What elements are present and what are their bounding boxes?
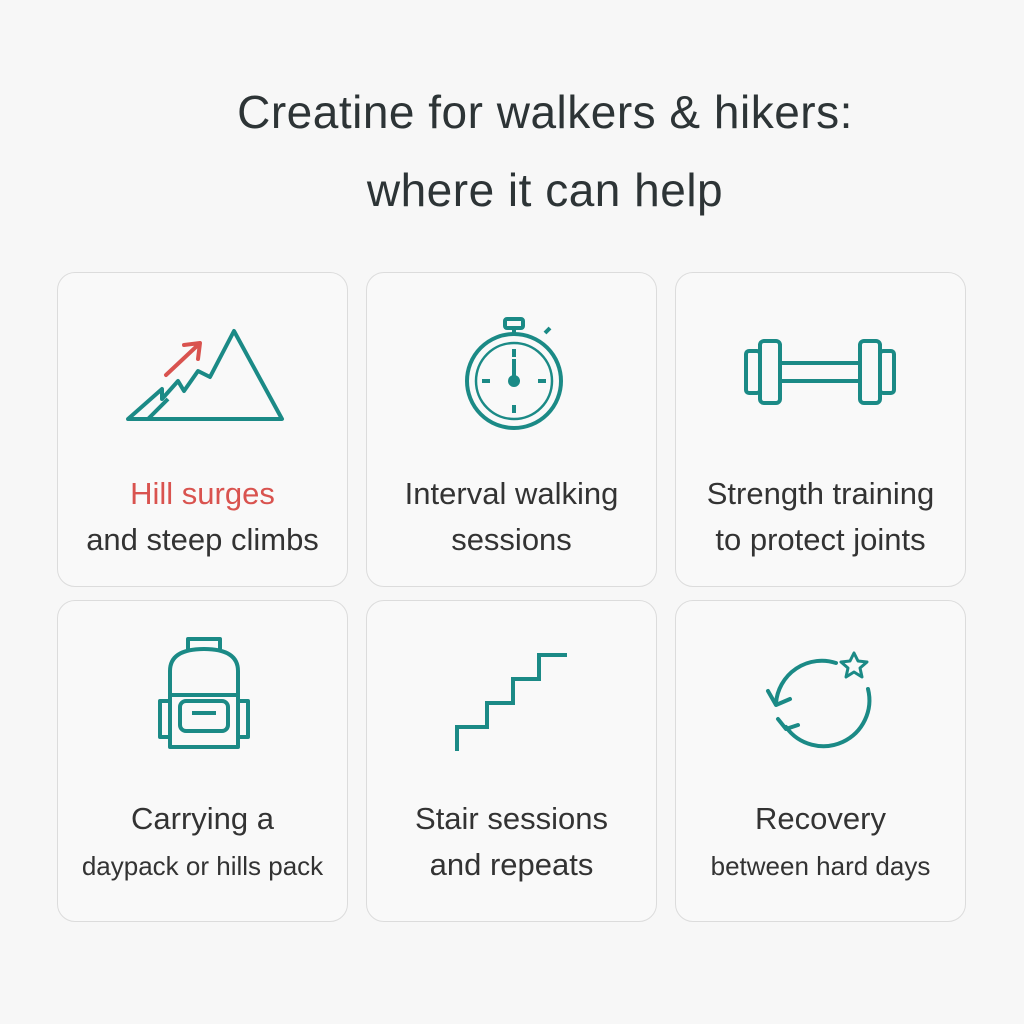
panel: recovery [675, 600, 966, 922]
text [707, 476, 934, 557]
icon: mountain with arrow [126, 328, 284, 421]
text [405, 476, 618, 557]
text [711, 801, 930, 881]
panel: daypack [57, 600, 348, 922]
icon: dumbbell [744, 339, 896, 405]
panel: interval walking [366, 272, 657, 587]
text: daypack or hills pack [82, 851, 323, 881]
text [415, 801, 608, 882]
text [82, 801, 324, 881]
subtitle: where it can help [367, 164, 723, 216]
text: between hard days [711, 851, 930, 881]
panel: strength [675, 272, 966, 587]
panel: stairs [366, 600, 657, 922]
text: Hill surges [130, 476, 275, 511]
text: Carrying a [131, 801, 274, 836]
text: Interval walking [405, 476, 618, 511]
text: and steep climbs [86, 522, 319, 557]
text: sessions [451, 522, 572, 557]
icon: backpack [158, 637, 250, 749]
icon: cycle arrows with star [766, 651, 872, 748]
panel: hill surges [57, 272, 348, 587]
text: Stair sessions [415, 801, 608, 836]
icon: stairs [455, 653, 567, 751]
text: to protect joints [715, 522, 926, 557]
text: Strength training [707, 476, 934, 511]
text: Recovery [755, 801, 886, 836]
title: Creatine for walkers & hikers: [237, 86, 853, 138]
icon: stopwatch [465, 317, 563, 430]
text: and repeats [430, 847, 593, 882]
text [86, 476, 319, 557]
